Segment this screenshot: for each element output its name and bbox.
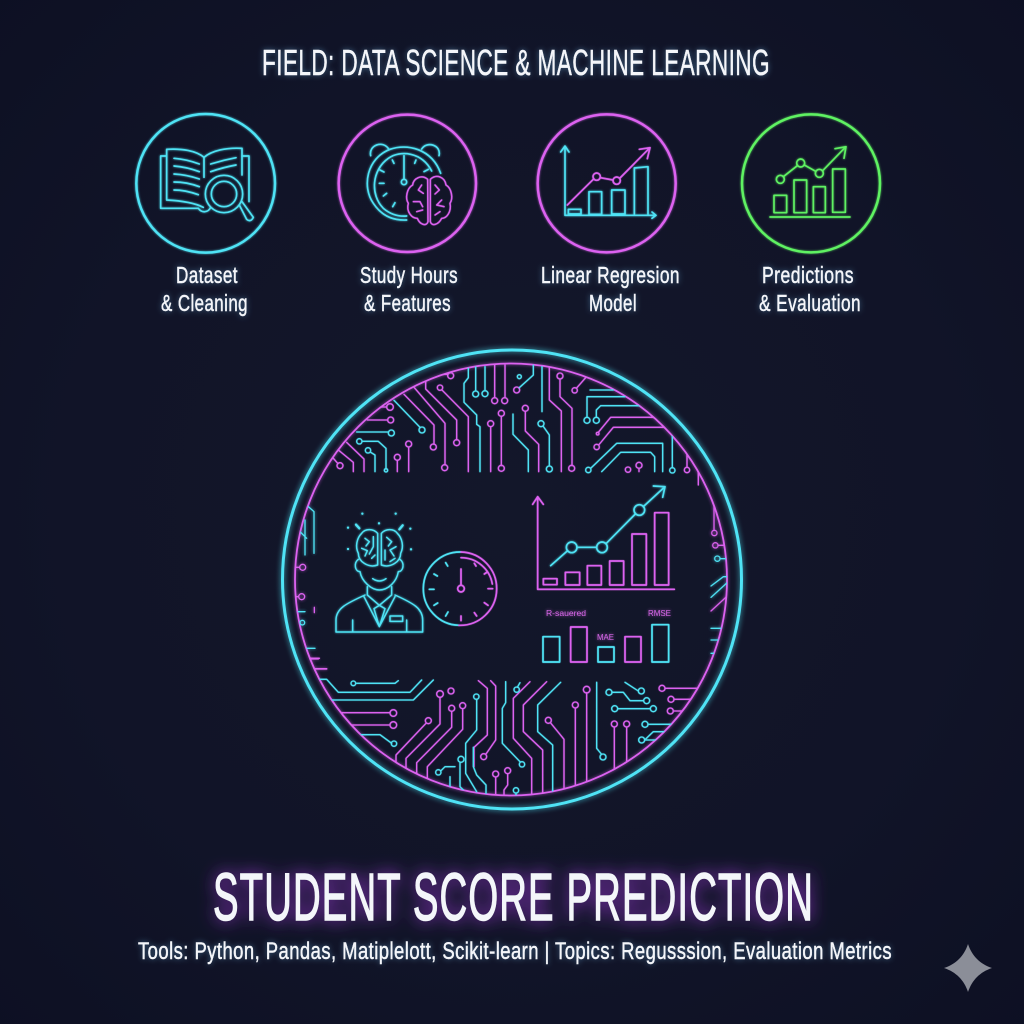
label: study hours and features: & Features [364,290,451,316]
chart: evaluation metrics [543,608,671,662]
icon: stopwatch gauge [423,552,497,625]
icon: student with brain [336,514,423,632]
chart: rising bars with trend line [533,486,674,589]
icon: clock and brain [339,115,476,252]
step 2: study hours and features [339,115,476,316]
step 3: linear regression model [538,114,680,316]
label: dataset and cleaning: Dataset [176,262,238,288]
label: predictions and evaluation: Predictions [762,262,854,288]
label: predictions and evaluation [759,262,861,316]
icon: open book with magnifier [136,114,275,253]
step 4: predictions and evaluation [742,114,880,316]
icon: prediction chart [742,114,880,252]
icon: four-point star [944,944,992,992]
label: linear regression model [541,262,680,316]
label: dataset and cleaning: & Cleaning [161,290,248,316]
metric labels: R-sauered [546,608,586,618]
label: linear regression model: Linear Regresion [541,262,680,288]
central circle panel [282,350,742,809]
circuit traces: top [333,365,698,485]
metric labels [546,608,671,642]
circuit traces: left and right sides [295,507,728,669]
metric labels: RMSE [648,608,671,618]
circuit traces: bottom [308,658,700,795]
metric bars [543,625,669,662]
outer cyan ring [282,350,742,809]
label: dataset and cleaning [161,262,248,316]
inner magenta ring [295,364,727,796]
label: study hours and features: Study Hours [360,262,458,288]
label: linear regression model: Model [589,290,637,316]
label: study hours and features [360,262,458,316]
metric labels: MAE [597,632,614,642]
icon: regression chart [538,114,676,252]
step 1: dataset and cleaning [136,114,275,316]
label: predictions and evaluation: & Evaluation [759,290,861,316]
